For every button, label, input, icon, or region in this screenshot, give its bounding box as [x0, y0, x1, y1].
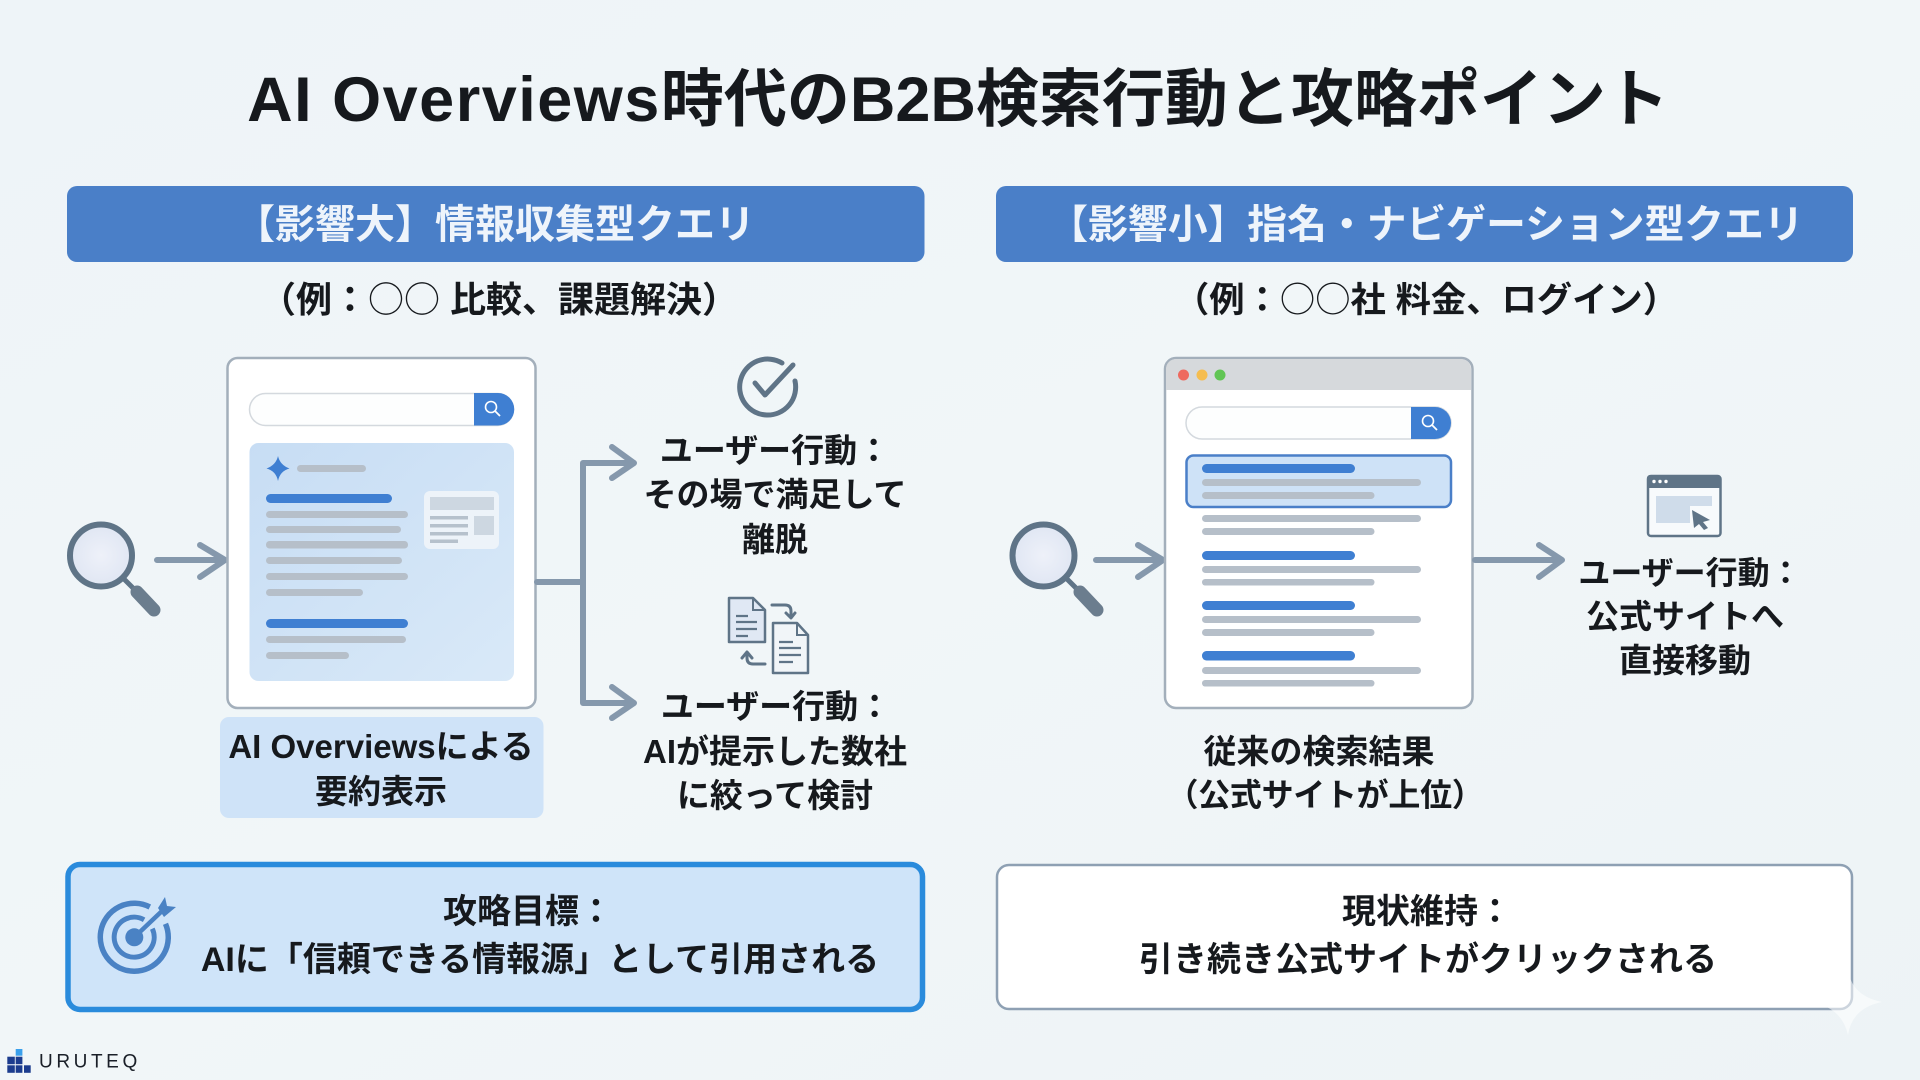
caption: AI overview: AI Overviewsによる: [228, 728, 534, 765]
title: AI Overviews時代のB2B検索行動と攻略ポイント: [247, 65, 1669, 135]
heading: low impact: [996, 186, 1853, 262]
icon: target: [100, 897, 176, 971]
arrow: branch to user behaviours: [537, 447, 634, 718]
logo: URUTEQ: [39, 1051, 141, 1072]
text: maintain: 引き続き公式サイトがクリックされる: [1139, 940, 1717, 979]
heading: low impact: 【影響小】指名・ナビゲーション型クエリ: [1048, 203, 1804, 247]
caption: AI overview: [220, 717, 544, 818]
caption: AI overview: 要約表示: [315, 773, 447, 810]
text: user behaviour satisfied: その場で満足して: [643, 476, 907, 513]
text: goal: 攻略目標：: [443, 893, 613, 931]
text: user behaviour satisfied: [643, 432, 907, 558]
caption: classic results: [1166, 733, 1484, 813]
search bar: [250, 393, 514, 426]
source thumbnail card: [424, 491, 499, 549]
text: user behaviour shortlist: ユーザー行動：: [661, 688, 891, 725]
heading: high impact: 【影響大】情報収集型クエリ: [235, 203, 755, 247]
text: goal: [201, 893, 879, 979]
arrow: classic results to behaviour: [1475, 545, 1562, 577]
icon: check mark: [740, 359, 796, 415]
text: user behaviour direct: 直接移動: [1619, 642, 1751, 679]
decorative sparkle: [1812, 970, 1882, 1035]
icon: magnifier right: [1012, 524, 1097, 610]
AI overview summary panel: [250, 443, 514, 681]
logo: [7, 1049, 141, 1073]
text: user behaviour direct: [1578, 555, 1802, 679]
text: goal: AIに「信頼できる情報源」として引用される: [201, 941, 879, 979]
text: user behaviour satisfied: ユーザー行動：: [660, 432, 890, 469]
text: user behaviour direct: ユーザー行動：: [1578, 555, 1802, 591]
arrow: query to AI overview: [157, 545, 225, 577]
heading: high impact: [67, 186, 924, 262]
search bar: [1186, 407, 1451, 439]
icon: browser window with cursor: [1647, 475, 1721, 536]
sub heading: high impact examples: （例：○○ 比較、課題解決）: [260, 271, 738, 323]
callout: maintain status quo: [997, 865, 1852, 1009]
panel: low impact query: [996, 186, 1853, 813]
caption: classic results: （公式サイトが上位）: [1166, 777, 1484, 813]
sub heading: low impact examples: （例：○○社 料金、ログイン）: [1174, 272, 1678, 323]
arrow: query to classic results: [1096, 545, 1163, 577]
text: maintain: [1139, 893, 1717, 979]
callout: attack goal: [68, 864, 922, 1010]
caption: classic results: 従来の検索結果: [1204, 733, 1434, 770]
text: user behaviour shortlist: [643, 688, 907, 814]
text: maintain: 現状維持：: [1342, 893, 1512, 931]
browser: AI overview result: [228, 358, 536, 708]
text: user behaviour direct: 公式サイトへ: [1586, 598, 1784, 635]
browser: classic search results: [1165, 358, 1472, 708]
text: user behaviour shortlist: AIが提示した数社: [643, 733, 907, 770]
highlighted official site result: [1186, 456, 1451, 507]
panel: high impact query: [67, 186, 924, 818]
icon: documents compare: [729, 598, 808, 673]
text: user behaviour satisfied: 離脱: [742, 521, 808, 558]
text: user behaviour shortlist: に絞って検討: [677, 777, 873, 814]
icon: magnifier left: [70, 524, 154, 610]
